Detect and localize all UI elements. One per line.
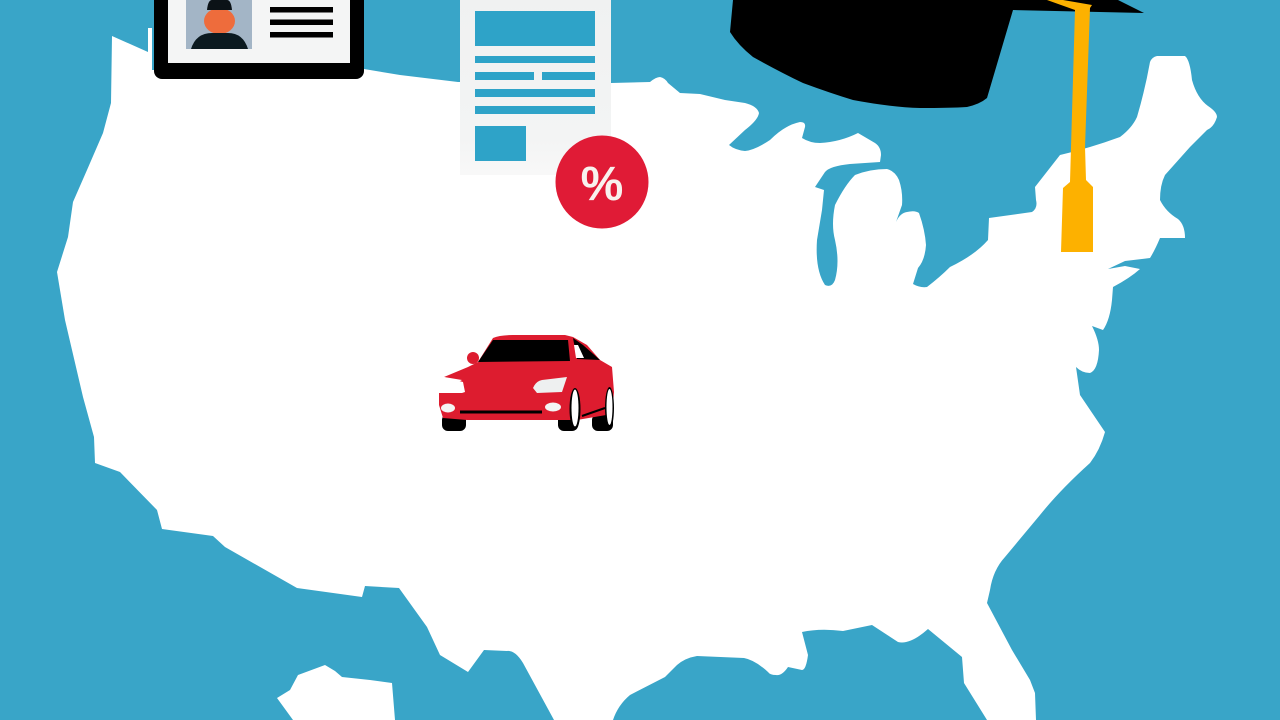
icon: ID card xyxy=(154,0,364,79)
icon: red car xyxy=(436,335,614,431)
ID text lines xyxy=(270,7,333,38)
ID photo xyxy=(186,0,252,49)
icon: tax document xyxy=(460,0,611,175)
cap tassel xyxy=(1047,0,1093,252)
map: Mexico landmass xyxy=(277,665,395,720)
icon: percent badge xyxy=(556,136,648,228)
icon: graduation cap xyxy=(730,0,1144,252)
icon: percent badge: % xyxy=(581,158,623,211)
